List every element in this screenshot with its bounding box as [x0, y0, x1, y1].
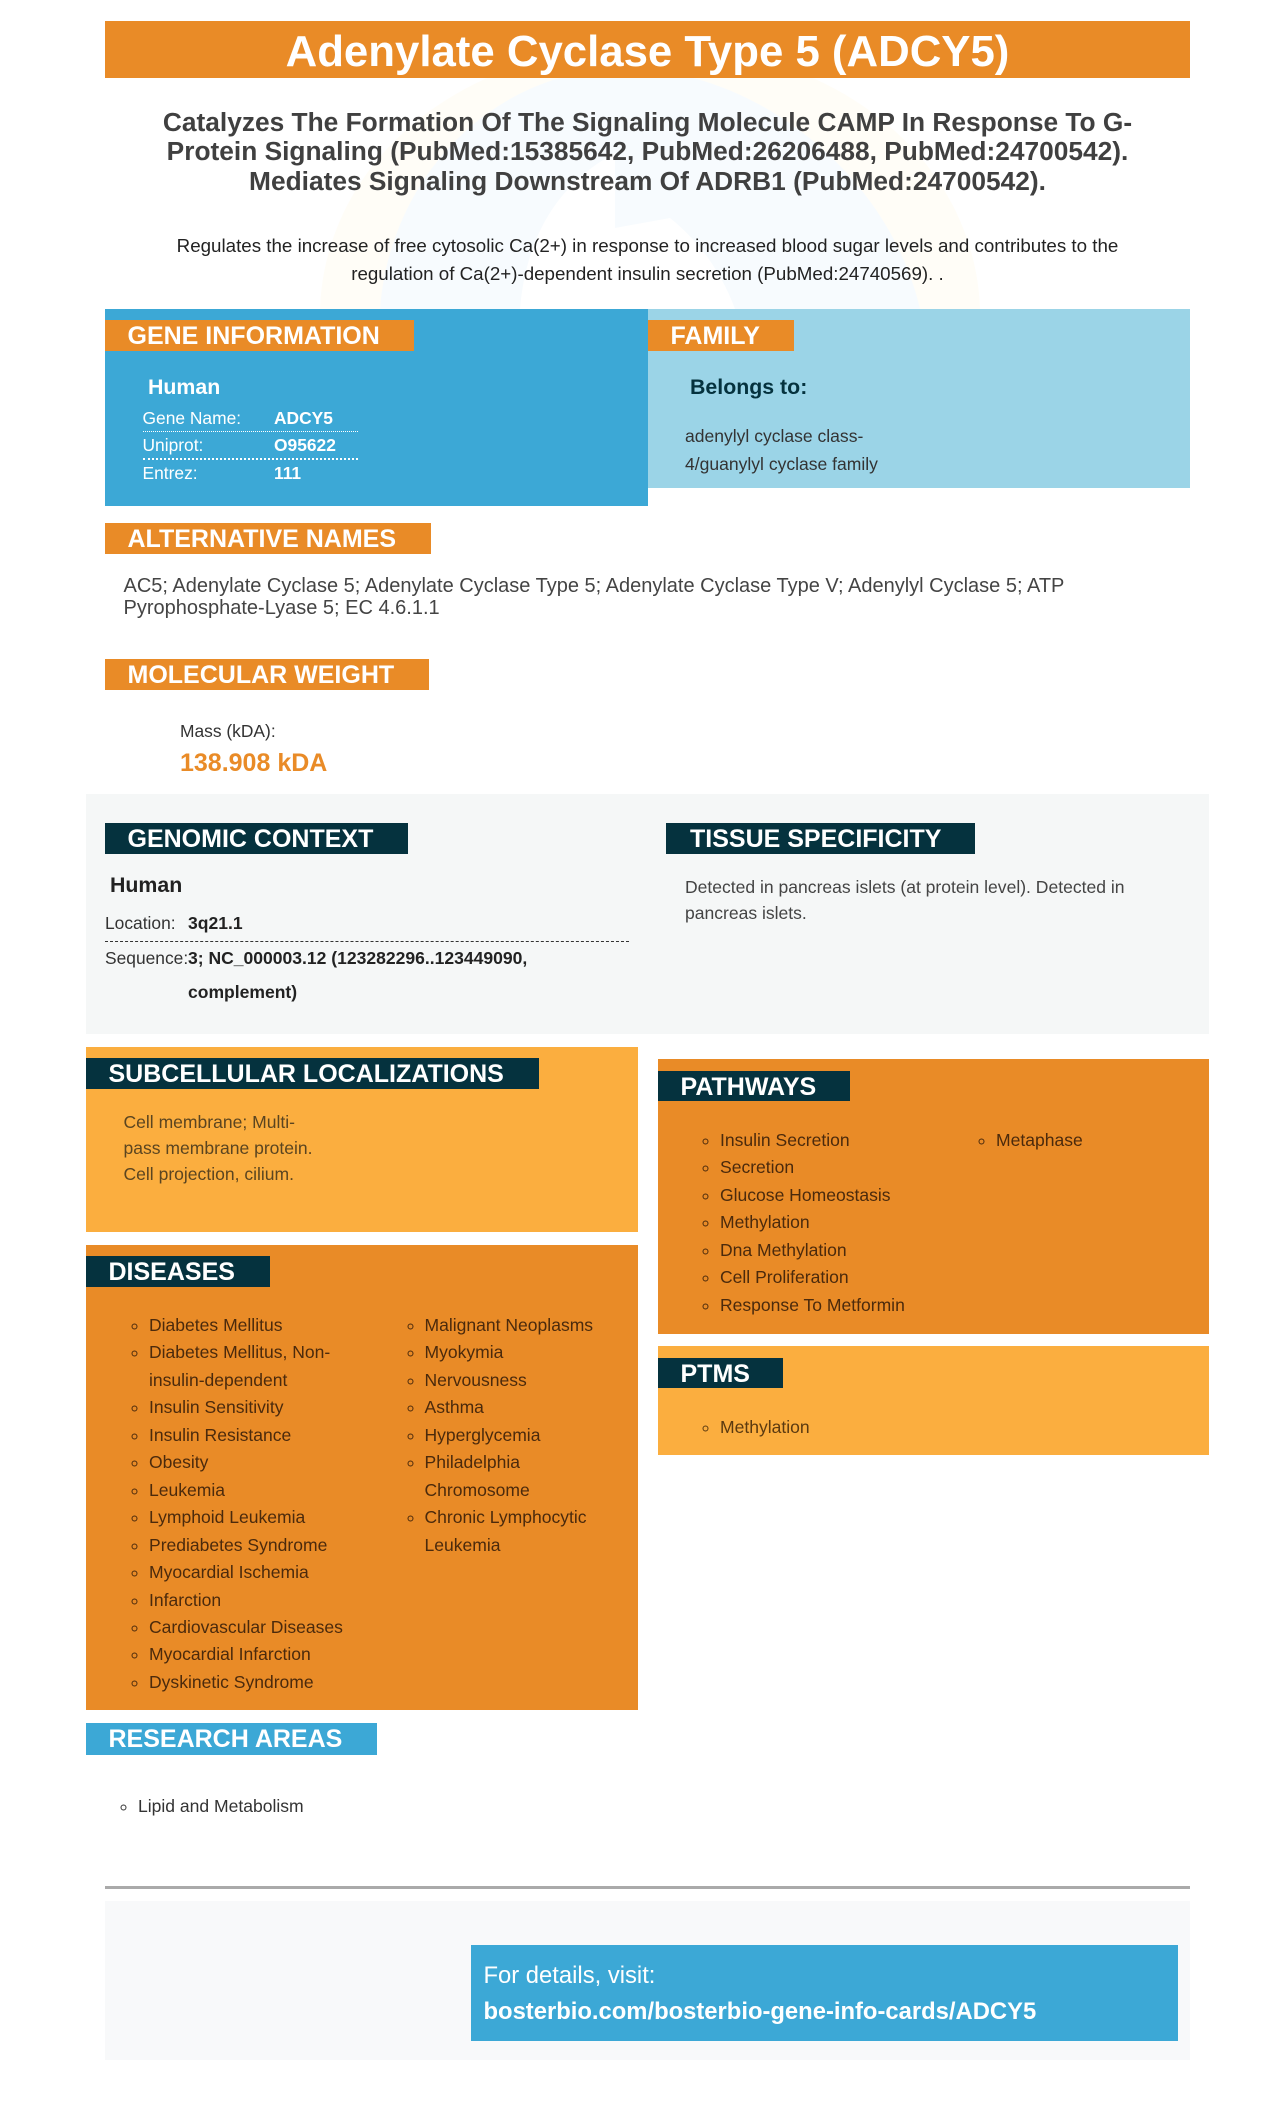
list: diseases column 1: Lymphoid Leukemia: [149, 1507, 305, 1527]
description paragraph: Regulates the increase of free cytosolic Ca(2+) in response to increased blood sugar levels and contributes to the: [177, 235, 1118, 256]
list: diseases column 1: Myocardial Ischemia: [149, 1562, 309, 1582]
list: pathways column 1: Methylation: [720, 1212, 810, 1232]
mass label: Mass (kDA):: [180, 721, 276, 741]
list: diseases column 1: Infarction: [149, 1590, 221, 1610]
list: diseases column 1: [132, 1315, 343, 1692]
callout label: For details, visit:: [484, 1962, 655, 1989]
list: pathways column 1: [702, 1130, 905, 1315]
footer divider: [105, 1886, 1190, 1889]
list: diseases column 2: Hyperglycemia: [424, 1425, 540, 1445]
title banner: Adenylate Cyclase Type 5 (ADCY5): [286, 27, 1009, 76]
panel: gene information: [105, 309, 648, 506]
list: diseases column 1: Cardiovascular Diseases: [149, 1617, 343, 1637]
panel: footer: [105, 1901, 1190, 2060]
description paragraph: regulation of Ca(2+)-dependent insulin secretion (PubMed:24740569). .: [351, 263, 944, 284]
list: diseases column 1: Prediabetes Syndrome: [149, 1535, 327, 1555]
row: uniprot: O95622: [274, 435, 336, 455]
list: diseases column 2: [408, 1315, 593, 1555]
list: pathways column 2: Metaphase: [996, 1130, 1083, 1150]
localization text: [124, 1112, 313, 1184]
location row: Location:: [105, 913, 176, 933]
row: gene name: ADCY5: [274, 408, 333, 428]
subtitle: [163, 107, 1132, 196]
row: gene name: Gene Name:: [142, 408, 241, 428]
row: uniprot: [142, 433, 358, 460]
localization text: Cell membrane; Multi-: [124, 1112, 295, 1132]
species label: Human: [148, 375, 220, 399]
list: pathways column 1: Glucose Homeostasis: [720, 1185, 891, 1205]
sequence value: 3; NC_000003.12 (123282296..123449090,: [188, 948, 527, 968]
alternative names text: AC5; Adenylate Cyclase 5; Adenylate Cyclase Type 5; Adenylate Cyclase Type V; Adenylyl Cyclase 5; ATP: [124, 575, 1064, 597]
tissue specificity text: Detected in pancreas islets (at protein level). Detected in: [685, 877, 1124, 897]
list: diseases column 1: Leukemia: [149, 1480, 225, 1500]
sequence label: Sequence:: [105, 948, 188, 968]
heading: alternative names: ALTERNATIVE NAMES: [128, 525, 396, 553]
sequence value: [188, 948, 527, 1002]
watermark logo: [320, 78, 980, 309]
heading: genomic context: GENOMIC CONTEXT: [128, 825, 373, 853]
subtitle: Protein Signaling (PubMed:15385642, PubMed:26206488, PubMed:24700542).: [167, 136, 1128, 166]
panel: subcellular localizations: [86, 1047, 638, 1232]
panel: family: [648, 309, 1190, 488]
list: diseases column 2: Philadelphia: [424, 1452, 520, 1472]
row: entrez: Entrez:: [142, 463, 198, 483]
heading: ptms: PTMS: [680, 1360, 750, 1388]
localization text: Cell projection, cilium.: [124, 1164, 294, 1184]
family text: adenylyl cyclase class-: [685, 426, 863, 446]
subtitle: Mediates Signaling Downstream Of ADRB1 (PubMed:24700542).: [249, 166, 1046, 196]
list: diseases column 2: Chronic Lymphocytic: [424, 1507, 587, 1527]
panel: ptms: [658, 1346, 1209, 1455]
callout url: bosterbio.com/bosterbio-gene-info-cards/ADCY5: [484, 1998, 1036, 2025]
list: diseases column 1: Diabetes Mellitus, Non-: [149, 1342, 330, 1362]
title banner: [105, 21, 1190, 78]
list: pathways column 1: Response To Metformin: [720, 1295, 905, 1315]
row: entrez: [142, 463, 301, 483]
heading: tissue specificity: TISSUE SPECIFICITY: [690, 825, 941, 853]
heading: diseases: DISEASES: [108, 1258, 235, 1286]
tissue specificity text: [685, 877, 1124, 923]
row: entrez: 111: [274, 463, 301, 483]
subtitle: Catalyzes The Formation Of The Signaling Molecule CAMP In Response To G-: [163, 107, 1132, 137]
list: research areas: Lipid and Metabolism: [138, 1796, 304, 1816]
family text: [685, 426, 878, 474]
heading: pathways: PATHWAYS: [680, 1073, 816, 1101]
list: diseases column 1: Dyskinetic Syndrome: [149, 1672, 314, 1692]
heading: molecular weight: MOLECULAR WEIGHT: [128, 661, 394, 689]
panel: pathways: [658, 1059, 1209, 1334]
tissue specificity text: pancreas islets.: [685, 903, 807, 923]
list: diseases column 1: insulin-dependent: [149, 1370, 287, 1390]
heading: diseases: [86, 1256, 270, 1287]
heading: pathways: [658, 1071, 850, 1101]
list: diseases column 1: Myocardial Infarction: [149, 1644, 311, 1664]
alternative names text: Pyrophosphate-Lyase 5; EC 4.6.1.1: [124, 597, 440, 619]
heading: subcellular localizations: SUBCELLULAR LOCALIZATIONS: [108, 1060, 504, 1088]
list: pathways column 1: Cell Proliferation: [720, 1267, 849, 1287]
list: diseases column 2: Asthma: [424, 1397, 484, 1417]
row: gene name: [142, 406, 358, 432]
heading: family: FAMILY: [670, 322, 760, 350]
species label: Human: [110, 873, 182, 897]
list: diseases column 1: Obesity: [149, 1452, 208, 1472]
list: diseases column 2: Malignant Neoplasms: [424, 1315, 593, 1335]
family text: 4/guanylyl cyclase family: [685, 454, 878, 474]
callout: details link: [471, 1945, 1178, 2041]
list: diseases column 2: Leukemia: [424, 1535, 501, 1555]
heading: gene information: GENE INFORMATION: [128, 322, 380, 350]
list: ptms: Methylation: [720, 1417, 810, 1437]
list: diseases column 2: Nervousness: [424, 1370, 527, 1390]
heading: family: [648, 320, 794, 351]
description paragraph: [177, 235, 1118, 284]
list: diseases column 1: Insulin Resistance: [149, 1425, 291, 1445]
panel: diseases: [86, 1245, 638, 1710]
dotted divider: [105, 941, 629, 942]
mass value: 138.908 kDA: [180, 749, 327, 777]
list: diseases column 1: Diabetes Mellitus: [149, 1315, 282, 1335]
list: pathways column 1: Dna Methylation: [720, 1240, 847, 1260]
belongs to label: Belongs to:: [690, 375, 807, 399]
list: diseases column 1: Insulin Sensitivity: [149, 1397, 283, 1417]
list: diseases column 2: Myokymia: [424, 1342, 503, 1362]
panel: genomic context and tissue specificity: [86, 794, 1209, 1034]
localization text: pass membrane protein.: [124, 1138, 313, 1158]
location value: 3q21.1: [188, 913, 243, 933]
alternative names text: [124, 575, 1064, 619]
heading: ptms: [658, 1358, 783, 1388]
list: pathways column 1: Secretion: [720, 1157, 794, 1177]
sequence value: complement): [188, 982, 297, 1002]
list: pathways column 1: Insulin Secretion: [720, 1130, 850, 1150]
list: diseases column 2: Chromosome: [424, 1480, 530, 1500]
row: uniprot: Uniprot:: [142, 435, 203, 455]
heading: research areas: RESEARCH AREAS: [108, 1725, 342, 1753]
